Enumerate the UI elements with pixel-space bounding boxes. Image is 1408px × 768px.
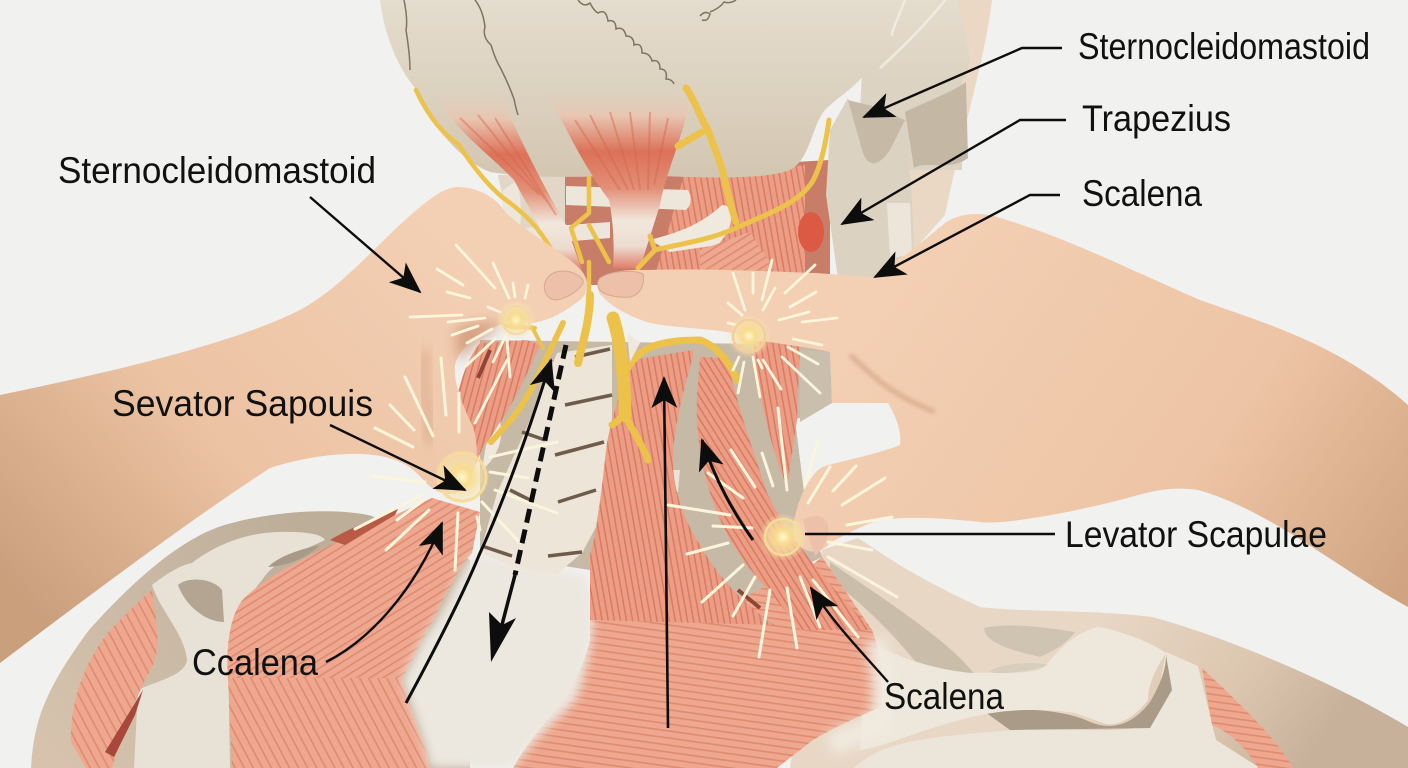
small bone blob	[990, 663, 1048, 673]
rays	[355, 358, 557, 570]
right deltoid	[1202, 668, 1293, 768]
arrow: long centre	[664, 378, 668, 728]
arrow: right strand	[702, 440, 753, 540]
central neck muscle	[590, 350, 775, 625]
glow	[759, 513, 807, 561]
arrow: trapezius	[842, 120, 1066, 224]
left shoulder	[31, 498, 480, 768]
fork left	[612, 415, 648, 460]
central occipital fan	[546, 86, 690, 268]
white left tendon	[482, 422, 501, 470]
pressure burst three	[355, 358, 557, 570]
ring	[502, 306, 530, 334]
upper bone bar	[566, 186, 691, 210]
left nerve	[416, 90, 558, 262]
label: ccalena: Ccalena	[192, 642, 318, 683]
lower collar bone	[854, 652, 1260, 768]
clavicle shadow	[985, 655, 1172, 730]
right vertebra tips	[668, 385, 720, 492]
left arm and hand	[0, 187, 587, 663]
palm shadow	[455, 322, 505, 362]
red gland	[798, 212, 824, 252]
neck background	[480, 340, 830, 620]
clavicle bone	[860, 627, 1166, 750]
lower right nerve trunk	[613, 318, 625, 415]
right vertical strand	[753, 340, 800, 487]
shoulder rim	[790, 538, 1408, 768]
right hand palm and fingers	[598, 214, 1408, 607]
acromion blob	[984, 625, 1075, 657]
skin side band	[905, 0, 992, 260]
label: sevator sapouis: Sevator Sapouis	[112, 383, 373, 424]
scapular notch	[178, 580, 224, 622]
shoulder rim	[31, 511, 470, 768]
muscle band	[655, 168, 800, 275]
nerve triangle hole	[627, 332, 640, 362]
scapula bone	[134, 532, 325, 768]
dark muscle gap	[478, 350, 760, 608]
lower left nerve	[491, 323, 563, 442]
arrow: sevator sapouis	[330, 425, 465, 490]
cranial sutures	[404, 0, 736, 115]
right upper nerve	[686, 88, 736, 222]
neck muscles	[450, 340, 872, 630]
dashed arrow shaft end	[498, 575, 515, 640]
nerve side branch	[678, 132, 702, 146]
arrow: sternocleidomastoid right	[864, 48, 1062, 117]
web shading	[850, 355, 935, 412]
leader arrows	[310, 48, 1066, 728]
glow	[727, 314, 771, 358]
teeth	[887, 203, 912, 258]
rays	[668, 408, 897, 657]
label: levator scapulae: Levator Scapulae	[1065, 514, 1327, 555]
line: levator scapulae	[805, 533, 1055, 535]
label: sternocleidomastoid right: Sternocleidomastoid	[1078, 26, 1370, 67]
right hand	[598, 214, 1408, 607]
arrow: long left	[406, 360, 551, 703]
thumb shadow	[424, 350, 430, 445]
cranium	[380, 0, 970, 177]
second bone bar	[525, 222, 610, 245]
arrow: sternocleidomastoid left	[310, 197, 420, 292]
central drop	[578, 295, 590, 363]
glow	[434, 449, 490, 505]
occipital muscles	[439, 86, 690, 270]
vertebrae	[480, 345, 720, 574]
jaw shadow	[905, 82, 968, 168]
nerves	[416, 88, 829, 460]
centre nerve	[571, 178, 609, 300]
label: scalena lower: Scalena	[884, 676, 1004, 717]
articular bone	[650, 205, 731, 252]
zygomatic highlights	[880, 0, 945, 68]
right trapezius	[513, 555, 882, 768]
ring	[438, 453, 486, 501]
arrow: scalena lower	[811, 588, 888, 682]
fan fibres	[460, 112, 668, 215]
left trapezius shadow strands	[330, 505, 400, 545]
muscle strand group	[697, 357, 872, 630]
arrow: ccalena	[326, 523, 442, 662]
right shoulder	[513, 538, 1408, 768]
left arm	[0, 187, 587, 663]
left trapezius lower	[228, 678, 430, 768]
label: scalena right: Scalena	[1082, 173, 1202, 214]
left neck fill	[498, 175, 570, 285]
pressure burst one	[410, 245, 536, 423]
skull	[380, 0, 992, 280]
jaw ramus	[826, 98, 915, 280]
upper neck behind skull	[498, 160, 830, 285]
dashed arrow head	[489, 612, 516, 662]
deltoid dark gap	[105, 690, 143, 757]
central white tendon	[402, 553, 593, 768]
lower muscle patch	[700, 232, 775, 275]
disc gaps	[482, 349, 612, 556]
left deltoid	[71, 590, 157, 768]
clavicle tendon fade	[830, 640, 883, 745]
mastoid inner	[848, 100, 905, 163]
arrow: scalena right	[875, 195, 1060, 277]
jaw below hand	[800, 350, 832, 422]
left trapezius upper	[227, 498, 480, 680]
glow	[496, 300, 536, 340]
label: trapezius: Trapezius	[1082, 98, 1231, 139]
right branch	[628, 340, 737, 380]
small left branch	[505, 326, 543, 348]
left occipital fan	[439, 90, 582, 270]
pressure burst four	[668, 408, 897, 657]
dashed double line	[515, 345, 566, 575]
inner collar band	[830, 562, 975, 680]
ring	[765, 519, 801, 555]
right finger nail	[598, 271, 643, 297]
acromion shadow	[268, 545, 320, 567]
left thumb nail	[544, 271, 583, 300]
rays	[728, 260, 837, 397]
rays	[410, 245, 528, 423]
pressure burst two	[727, 260, 837, 397]
right thumb nail	[803, 516, 828, 556]
ring	[733, 320, 765, 352]
left neck strands	[450, 340, 540, 490]
left bone piece	[502, 182, 522, 240]
vertebra column	[480, 345, 612, 574]
right muscle band	[762, 165, 805, 275]
label: sternocleidomastoid left: Sternocleidomastoid	[58, 150, 376, 191]
cheek region	[860, 0, 963, 170]
muscle backing	[565, 160, 830, 285]
long right nerve	[638, 120, 829, 268]
